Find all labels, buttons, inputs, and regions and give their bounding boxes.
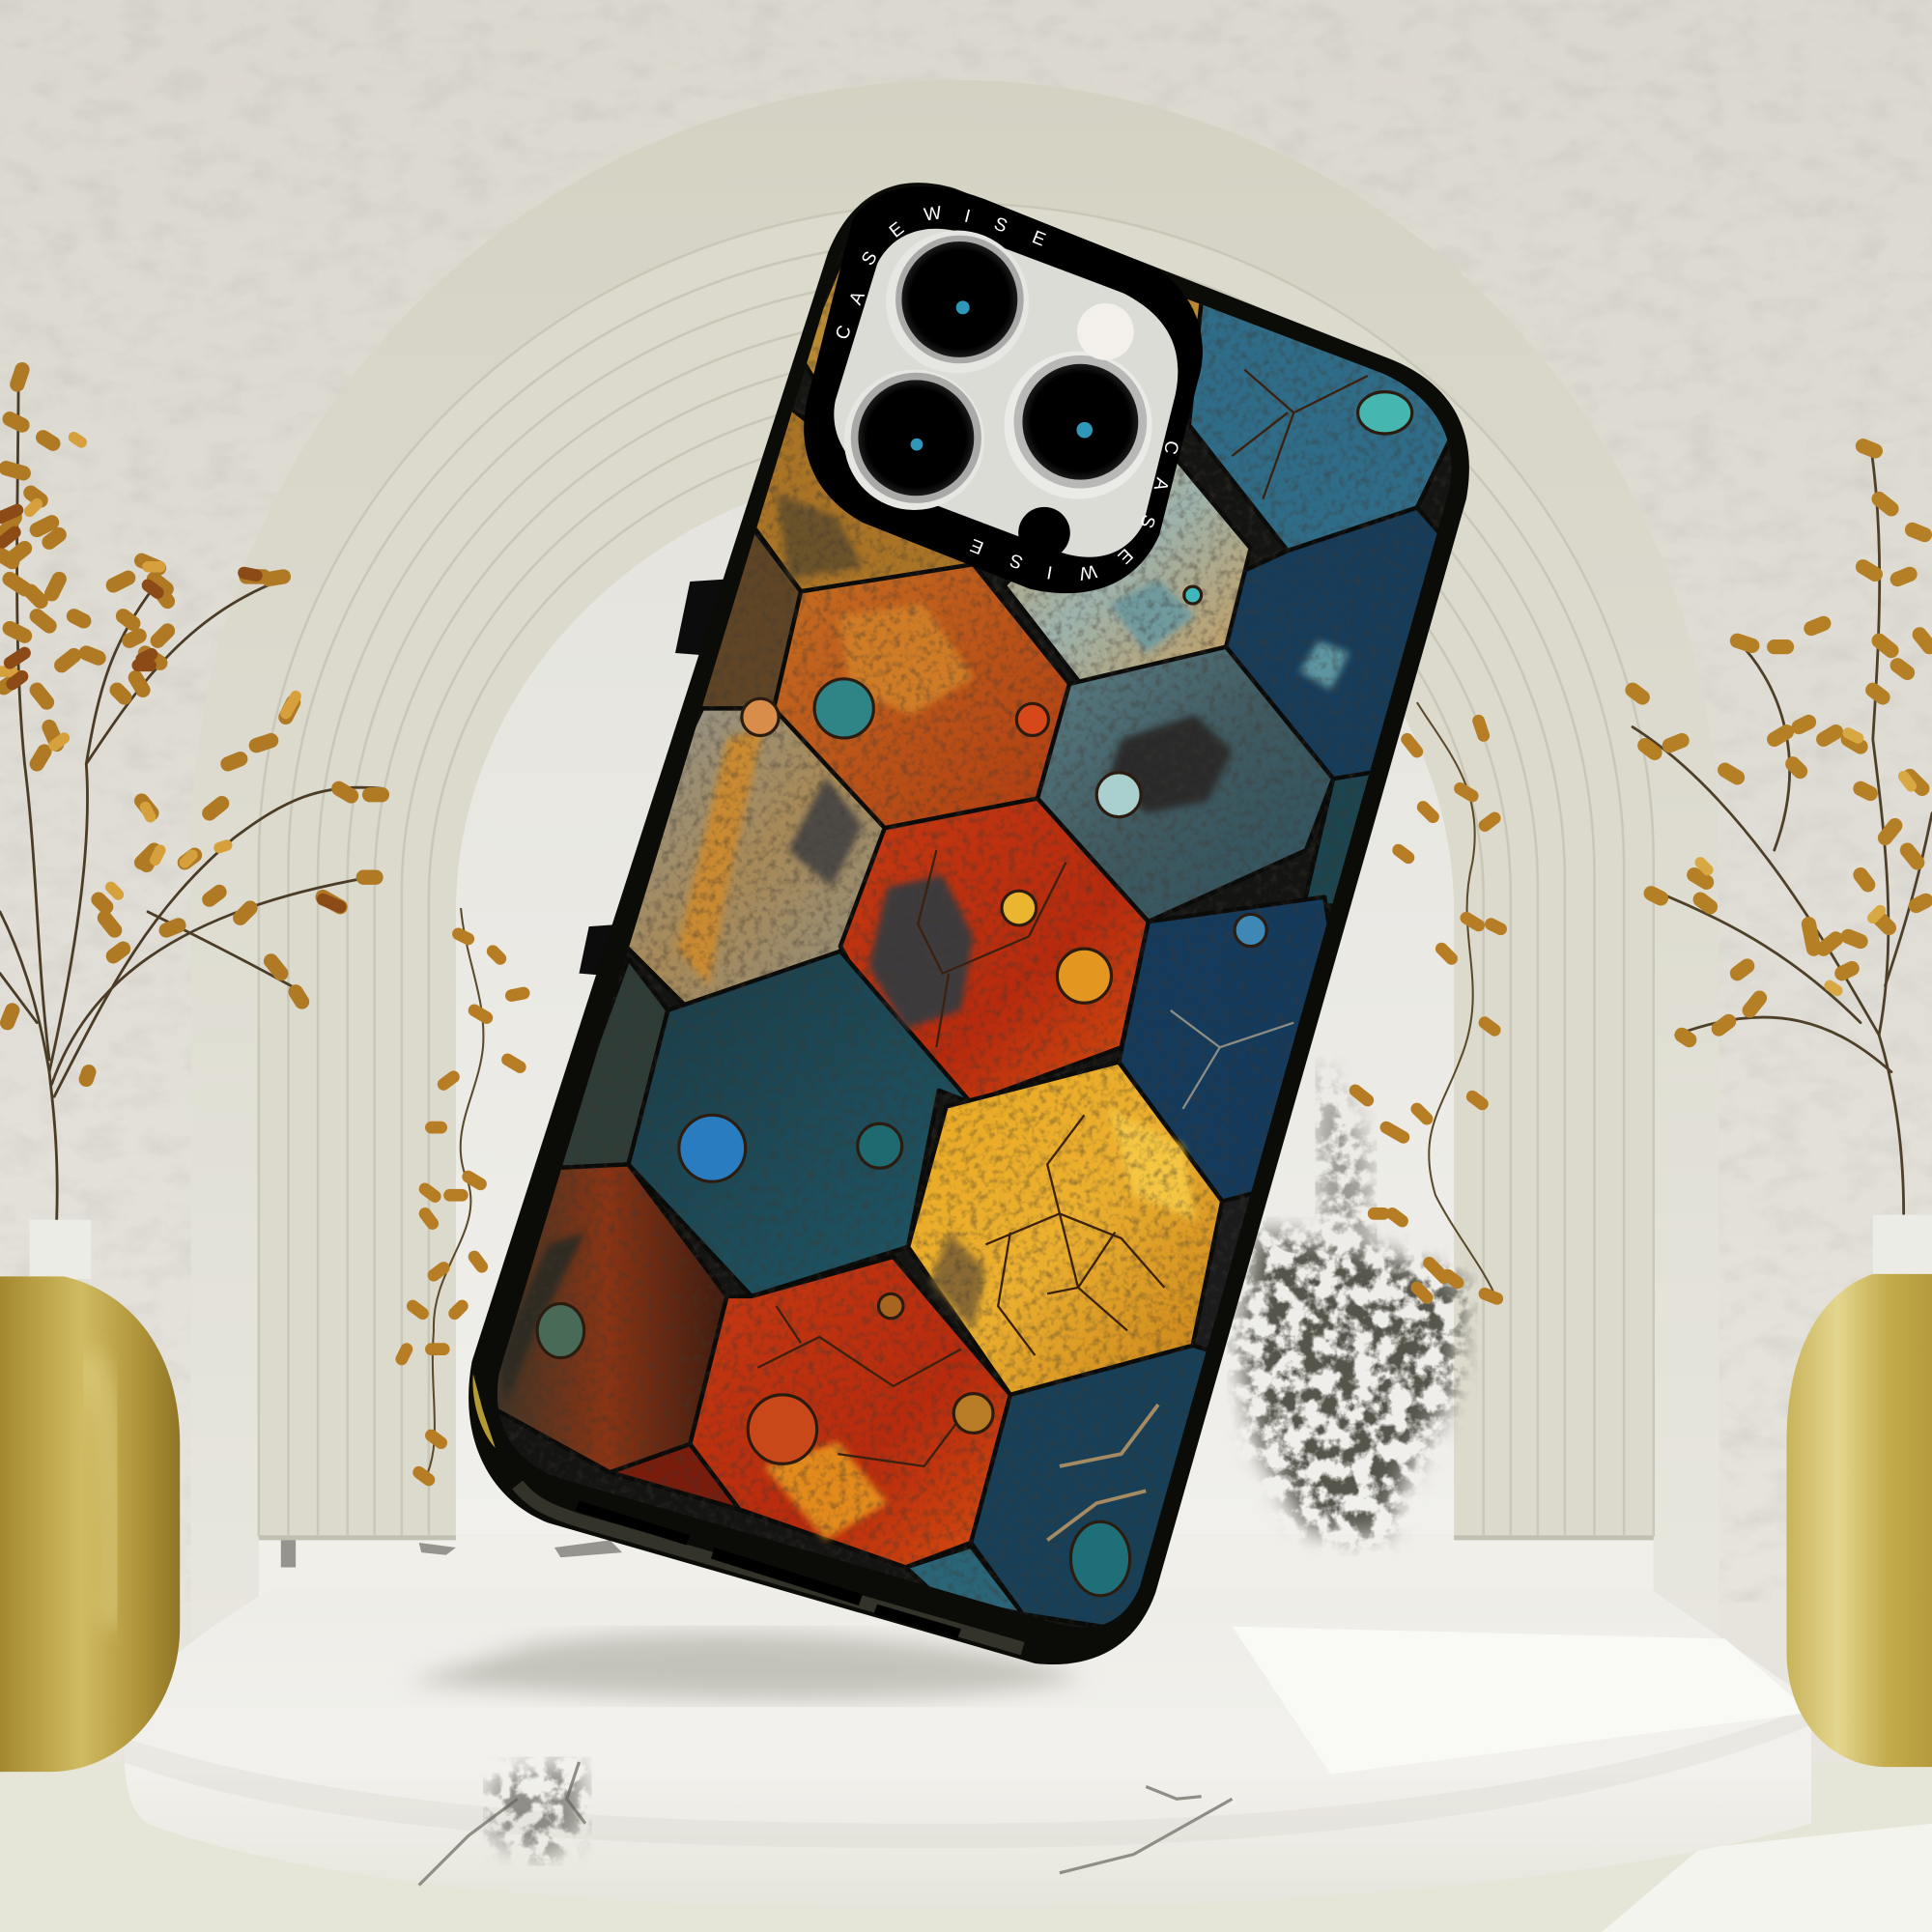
hex: sand and teal — [1005, 438, 1251, 685]
surface colour patches — [499, 493, 1350, 1540]
brand text: upper: A — [846, 288, 869, 308]
right tree branches — [1633, 443, 1932, 1213]
hex: deep blue right — [1226, 508, 1448, 779]
brand text: lower: S — [1008, 549, 1026, 572]
right vase — [1786, 1215, 1932, 1767]
camera window — [834, 229, 1178, 557]
brand text: lower: S — [1135, 512, 1159, 530]
hex: black sliver — [1193, 1189, 1269, 1355]
brand text: lower — [968, 439, 1182, 583]
phone cast shadow — [407, 1633, 1084, 1700]
brand text: upper: I — [962, 207, 972, 227]
right tree leaves — [1633, 446, 1929, 1040]
flash — [1077, 303, 1134, 360]
hex: brown — [487, 1164, 727, 1472]
brand text: upper: E — [886, 218, 908, 242]
hex: tan stone — [622, 708, 885, 1008]
left tree branches — [0, 370, 382, 1220]
brand text: upper: S — [858, 248, 882, 270]
hex: far right dark — [1304, 771, 1370, 908]
phone case — [469, 173, 1491, 1664]
side buttons — [579, 579, 727, 976]
hex: blue-grey — [1037, 647, 1333, 922]
hexagon artwork — [497, 251, 1451, 1627]
left middle sprig — [402, 908, 524, 1480]
hex: navy — [1119, 897, 1337, 1202]
brand text: lower: C — [1159, 439, 1182, 456]
marble veining on back wall — [281, 1060, 1466, 1567]
right middle sprig — [1355, 702, 1501, 1300]
hex: deep teal — [629, 952, 971, 1296]
hex: small teal bottom — [906, 1547, 1023, 1614]
hex: blue top right — [1189, 301, 1460, 551]
hex: small red bottom — [610, 1444, 739, 1509]
lens: right — [1005, 352, 1152, 499]
left tree leaves — [0, 370, 382, 1079]
brand text: upper: C — [832, 323, 856, 342]
hex: yellow — [908, 1062, 1222, 1395]
brand text: upper — [832, 203, 1048, 342]
lidar — [1018, 507, 1070, 558]
bottom lip gloss — [518, 1485, 1023, 1649]
hex: red lower — [690, 1257, 1010, 1567]
brand text: upper: W — [923, 203, 943, 226]
lens: lower left — [844, 370, 984, 510]
cracks — [757, 370, 1368, 1540]
gemstones — [537, 392, 1412, 1596]
camera bumper — [804, 186, 1203, 593]
hex: blue lower right — [971, 1346, 1226, 1633]
marble floor — [0, 1762, 1932, 1932]
stepped arch alcove — [191, 80, 1719, 1638]
lens: top — [886, 231, 1029, 373]
hex: dark rust left — [552, 958, 668, 1168]
brand text: upper: S — [991, 213, 1010, 238]
hex: orange — [774, 564, 1069, 828]
phone body — [469, 183, 1469, 1664]
bottom ports — [576, 1501, 961, 1638]
grit texture — [469, 173, 1491, 1651]
brand text: lower: A — [1150, 475, 1172, 494]
brand text: lower: E — [1114, 544, 1136, 567]
gold reflection — [472, 1374, 496, 1448]
left vase — [0, 1220, 180, 1772]
brand text: lower: E — [968, 534, 986, 557]
brand text: lower: W — [1078, 560, 1098, 583]
hex: red — [840, 799, 1149, 1103]
brand text: upper: E — [1029, 227, 1048, 251]
marble plinth — [124, 1589, 1811, 1910]
brand text: lower: I — [1045, 561, 1054, 582]
hex: rust left — [699, 529, 801, 708]
hex: top gold strip — [806, 244, 1213, 380]
hex: gold rust — [754, 407, 974, 591]
